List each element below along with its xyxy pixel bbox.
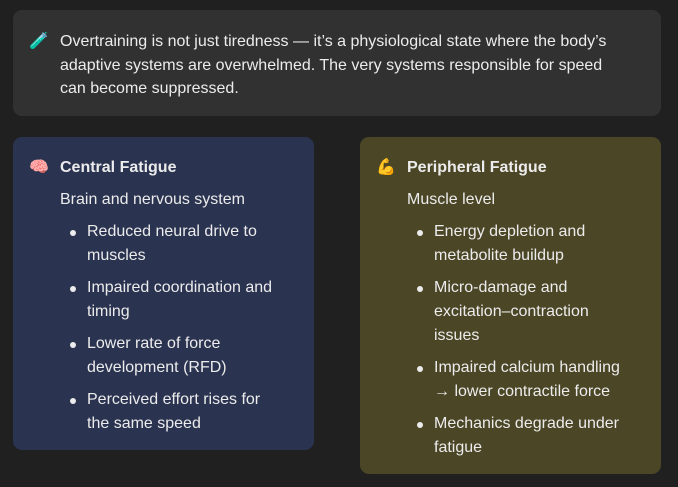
list: central [70,223,272,432]
list: peripheral [417,223,620,456]
list: central: Impaired coordination and timing [87,279,272,320]
list: peripheral: Impaired calcium handling → lower contractile force [434,359,620,400]
panel: central fatigue [13,137,314,450]
icon: muscle: 💪 [376,159,396,176]
list: peripheral: Mechanics degrade under fatigue [434,415,619,456]
list: central: Lower rate of force development (RFD) [87,335,227,376]
heading: peripheral fatigue: Peripheral Fatigue [407,159,547,176]
list: peripheral: Micro-damage and excitation–contraction issues [434,279,589,344]
list: peripheral: Energy depletion and metabolite buildup [434,223,585,264]
list: central: Perceived effort rises for the same speed [87,391,260,432]
callout: intro [13,10,661,116]
subtitle: Muscle level [407,191,495,208]
icon: test tube: 🧪 [29,33,49,50]
panel: peripheral fatigue [360,137,661,474]
icon: brain: 🧠 [29,159,49,176]
heading: central fatigue: Central Fatigue [60,159,176,176]
intro text: Overtraining is not just tiredness — it’s a physiological state where the body’s adaptive systems are overwhelmed. The very systems responsible for speed can become suppressed. [60,33,606,97]
subtitle: Brain and nervous system [60,191,245,208]
list: central: Reduced neural drive to muscles [87,223,257,264]
